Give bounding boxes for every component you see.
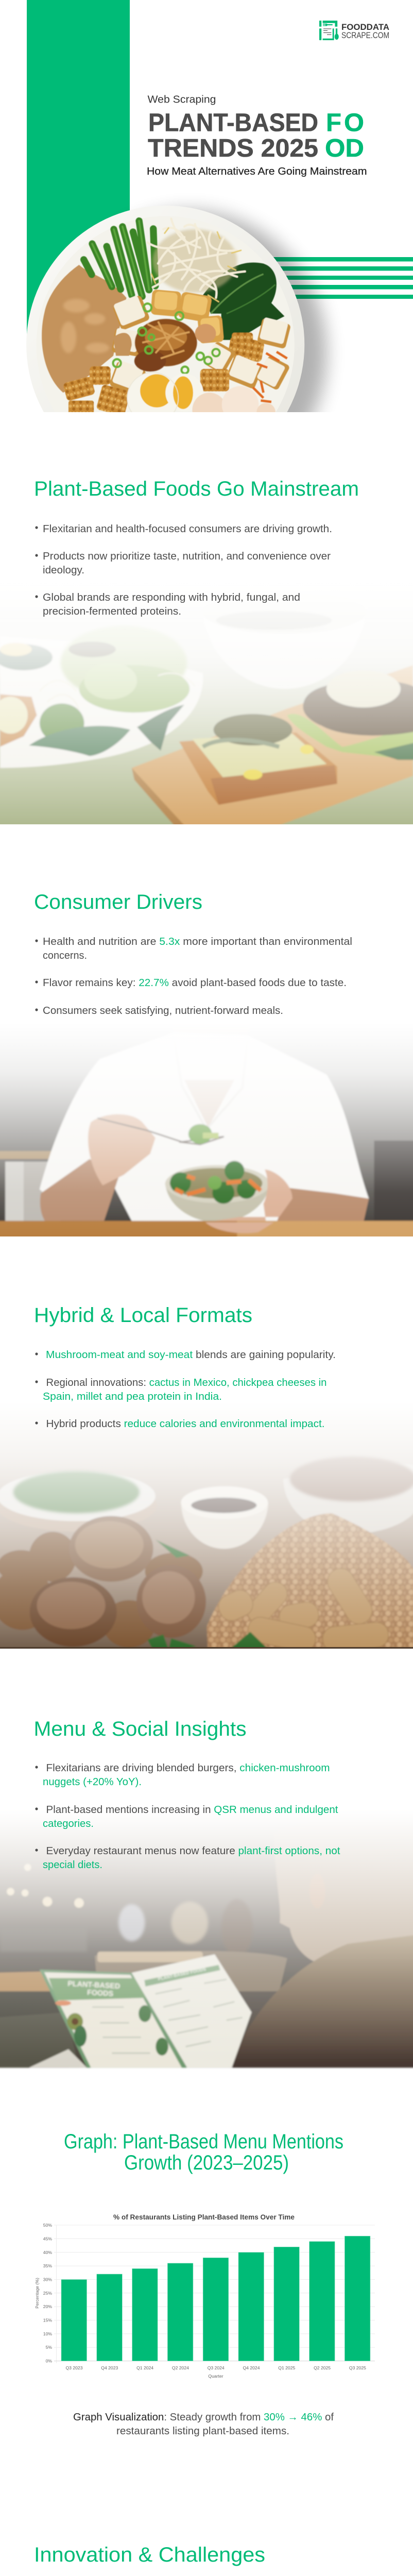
decorative stripes — [273, 257, 413, 299]
fried shallots — [134, 319, 197, 371]
bar chart: 40% — [43, 2250, 52, 2255]
bullet list: Hybrid products reduce calories and environmental impact. — [46, 1418, 324, 1430]
photo: diner reading a plant-based menu: PLANT-BASED FOODS — [158, 1967, 206, 1981]
photo: man eating a vegetable bowl — [0, 824, 413, 1243]
bullet list — [35, 1762, 340, 1871]
bar chart: 20% — [43, 2304, 52, 2309]
bullet list: Global brands are responding with hybrid, fungal, and — [43, 591, 300, 603]
bar chart: 50% — [43, 2223, 52, 2228]
bar chart: 0% — [46, 2359, 52, 2364]
bullet list — [35, 936, 352, 1016]
bean sprouts — [153, 229, 237, 293]
bullet list: categories. — [43, 1818, 94, 1829]
bar chart: Q3 2025 — [349, 2365, 366, 2370]
bullet list: Flexitarians are driving blended burgers, chicken-mushroom — [46, 1762, 330, 1774]
heading: Hybrid & Local Formats — [34, 1304, 252, 1327]
panel: menu and social insights — [0, 1649, 413, 2067]
photo: packaged plant-based products — [0, 2473, 413, 2576]
bullet list: ideology. — [43, 564, 84, 576]
logo: header: SCRAPE.COM — [341, 30, 389, 40]
bar chart: Q4 2024 — [243, 2365, 260, 2370]
graph caption: restaurants listing plant-based items. — [116, 2425, 289, 2437]
green beans — [84, 221, 156, 296]
bullet list: special diets. — [43, 1859, 102, 1871]
tofu and tempeh — [150, 290, 181, 317]
peanut sauce — [42, 265, 127, 393]
spinach — [203, 263, 284, 340]
bullet list: nuggets (+20% YoY). — [43, 1776, 142, 1788]
bar chart: Q2 2025 — [314, 2365, 331, 2370]
bullet list: concerns. — [43, 950, 87, 961]
bullet list — [35, 523, 332, 617]
chart title: % of Restaurants Listing Plant-Based Items Over Time — [113, 2213, 295, 2221]
eyebrow: Web Scraping — [147, 94, 216, 105]
bars — [61, 2236, 370, 2361]
bullet list — [35, 1349, 336, 1430]
bullet list: Health and nutrition are 5.3x more important than environmental — [43, 936, 352, 947]
bar chart: 5% — [46, 2345, 52, 2350]
panel: hybrid and local formats — [0, 1236, 413, 1655]
photo: diner reading a plant-based menu: PLANT-BASED — [67, 1980, 121, 1991]
green vertical band — [27, 0, 130, 340]
bar chart: Q3 2024 — [208, 2365, 225, 2370]
graph caption: Graph Visualization: Steady growth from 30% → 46% of — [73, 2411, 334, 2423]
photo: plant-based bowl — [26, 200, 337, 412]
carrots — [253, 352, 287, 402]
bullet list: Products now prioritize taste, nutrition, and convenience over — [43, 550, 331, 562]
bullet list: Regional innovations: cactus in Mexico, chickpea cheeses in — [46, 1377, 326, 1388]
panel: consumer drivers — [0, 824, 413, 1243]
bar chart: 45% — [43, 2236, 52, 2241]
bullet list: Flavor remains key: 22.7% avoid plant-based foods due to taste. — [43, 977, 347, 989]
title — [148, 113, 364, 157]
spring onions — [113, 303, 220, 374]
title: PLANT-BASED — [148, 109, 318, 137]
bullet list: Plant-based mentions increasing in QSR menus and indulgent — [46, 1804, 338, 1816]
panel: innovation and challenges — [0, 2473, 413, 2576]
panel: graph — [35, 2130, 375, 2437]
bar chart: 10% — [43, 2331, 52, 2336]
bar chart: 25% — [43, 2291, 52, 2296]
subtitle: How Meat Alternatives Are Going Mainstream — [147, 166, 367, 177]
heading: Menu & Social Insights — [34, 1718, 246, 1740]
bullet list: Spain, millet and pea protein in India. — [43, 1391, 222, 1402]
bullet list: Mushroom-meat and soy-meat blends are gaining popularity. — [46, 1349, 336, 1361]
x axis label: Quarter — [208, 2374, 223, 2379]
title: TRENDS 2025 — [148, 134, 318, 162]
bar chart: 30% — [43, 2277, 52, 2282]
bar chart: 15% — [43, 2317, 52, 2323]
bar chart — [35, 2213, 375, 2379]
bullet list: Everyday restaurant menus now feature plant-first options, not — [46, 1845, 340, 1857]
bar chart: Q4 2023 — [101, 2365, 118, 2370]
bullet list: precision-fermented proteins. — [43, 605, 181, 617]
bullet list: Consumers seek satisfying, nutrient-forward meals. — [43, 1005, 283, 1016]
heading — [64, 2130, 343, 2174]
bar chart: Q1 2025 — [278, 2365, 295, 2370]
heading: Innovation & Challenges — [34, 2544, 265, 2566]
bar chart: Q2 2024 — [172, 2365, 189, 2370]
heading: Consumer Drivers — [34, 891, 202, 913]
heading: Growth (2023–2025) — [124, 2151, 289, 2174]
graph caption — [73, 2411, 334, 2437]
bullet list: Flexitarian and health-focused consumers are driving growth. — [43, 523, 332, 535]
panel: plant-based foods go mainstream — [0, 412, 413, 831]
title: O — [344, 109, 364, 137]
egg — [127, 374, 169, 408]
title: OD — [325, 134, 364, 162]
photo: diner reading a plant-based menu: FOODS — [87, 1989, 113, 1998]
heading: Plant-Based Foods Go Mainstream — [34, 478, 359, 500]
bar chart: Q3 2023 — [66, 2365, 83, 2370]
photo: salad and toast — [0, 412, 413, 831]
title: F — [326, 109, 341, 137]
logo: header: FOODDATA — [341, 22, 389, 32]
logo: header — [319, 21, 389, 40]
panel: hero — [26, 0, 413, 412]
heading: Graph: Plant-Based Menu Mentions — [64, 2130, 343, 2153]
bar chart: Q1 2024 — [136, 2365, 153, 2370]
bar chart: 35% — [43, 2263, 52, 2268]
photo: diner reading a plant-based menu — [0, 1649, 413, 2067]
photo: patties and crumbles — [0, 1236, 413, 1655]
y axis label: Percentage (%) — [35, 2278, 40, 2309]
crackers — [192, 393, 223, 412]
